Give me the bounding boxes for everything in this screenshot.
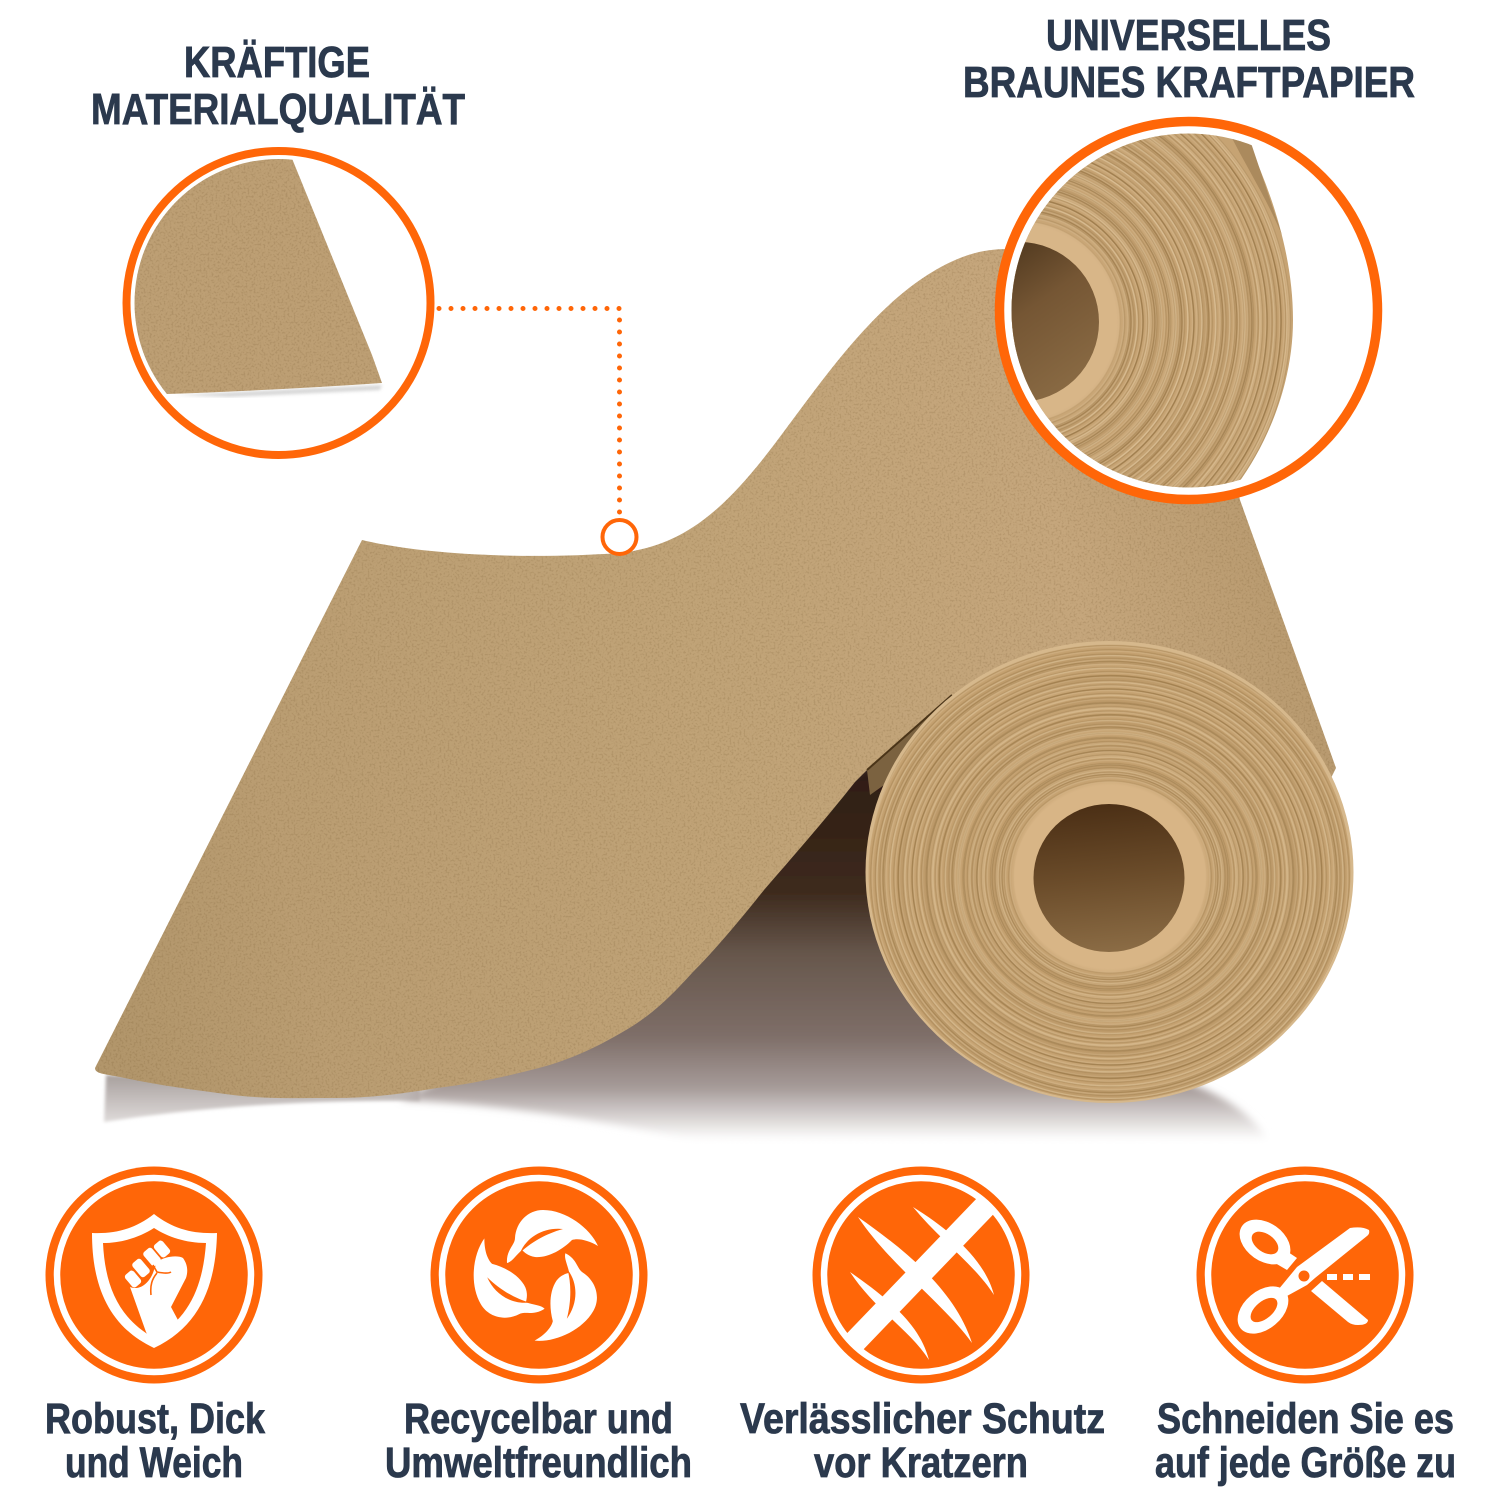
title: Kräftige Materialqualität: KRÄFTIGE	[184, 38, 370, 87]
connector end marker	[602, 520, 636, 554]
icon: scratches crossed out	[812, 1166, 1030, 1384]
caption: Recycelbar und Umweltfreundlich: Umweltfreundlich	[385, 1439, 692, 1487]
kraft paper sheet	[95, 249, 1336, 1098]
pale reflection at the sheet corner	[104, 1075, 420, 1122]
caption: Verlässlicher Schutz vor Kratzern	[740, 1395, 1105, 1487]
caption: Robust, Dick und Weich: und Weich	[65, 1439, 243, 1487]
icon: recycling leaves	[430, 1166, 648, 1384]
roll core ring	[1012, 782, 1208, 972]
dotted connector line	[439, 308, 620, 514]
title: Kräftige Materialqualität	[91, 38, 465, 134]
title: Kräftige Materialqualität: MATERIALQUALITÄT	[91, 85, 465, 134]
inset: roll detail circle	[994, 116, 1382, 504]
roll core hole	[1034, 804, 1184, 952]
caption: Robust, Dick und Weich	[45, 1395, 265, 1487]
caption: Recycelbar und Umweltfreundlich: Recycelbar und	[404, 1395, 673, 1443]
caption: Schneiden Sie es auf jede Größe zu	[1155, 1395, 1456, 1487]
title: Universelles braunes Kraftpapier	[963, 11, 1415, 107]
title: Universelles braunes Kraftpapier: UNIVERSELLES	[1046, 11, 1331, 60]
caption: Verlässlicher Schutz vor Kratzern: vor Kratzern	[814, 1439, 1028, 1487]
icon: scissors	[1196, 1166, 1414, 1384]
paper roll end	[866, 641, 1354, 1103]
title: Universelles braunes Kraftpapier: BRAUNES KRAFTPAPIER	[963, 58, 1415, 107]
icon: shield with fist	[46, 1166, 262, 1384]
caption: Robust, Dick und Weich: Robust, Dick	[45, 1395, 265, 1443]
ground shadow under the sheet	[400, 740, 1275, 1150]
inset: material quality circle	[120, 150, 430, 455]
shaded wedge between sheet and roll	[867, 695, 952, 795]
caption: Verlässlicher Schutz vor Kratzern: Verlässlicher Schutz	[740, 1395, 1105, 1443]
caption: Recycelbar und Umweltfreundlich	[385, 1395, 692, 1487]
